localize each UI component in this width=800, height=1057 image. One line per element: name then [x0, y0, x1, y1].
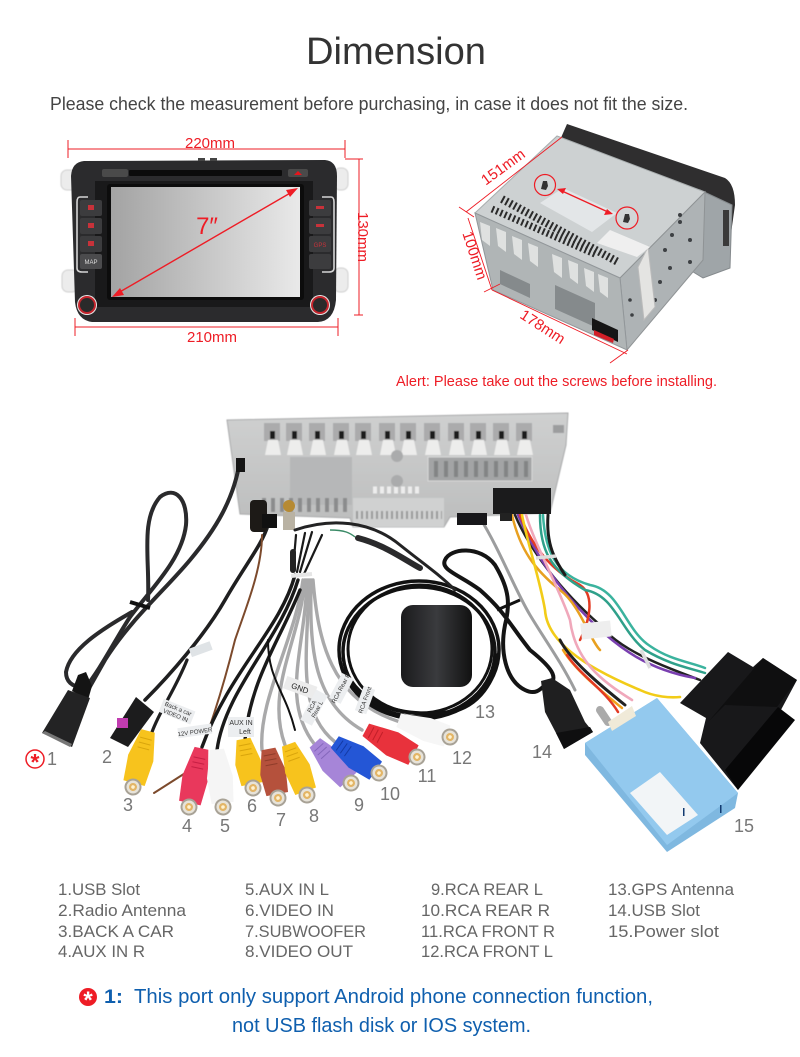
back plate — [227, 413, 568, 527]
plug 10 blue — [327, 731, 393, 789]
legend column 4: 14.USB Slot — [608, 901, 700, 920]
alert text: Alert: Please take out the screws before installing. — [396, 374, 717, 390]
subtitle: Please check the measurement before purchasing, in case it does not fit the size. — [50, 94, 688, 114]
number labels — [47, 702, 754, 836]
number labels: 11 — [418, 766, 436, 786]
plug 6 yellow — [231, 736, 267, 799]
right buttons: GPS — [314, 243, 326, 249]
number labels: 3 — [123, 795, 133, 815]
icon: asterisk marker 1 — [26, 749, 44, 775]
legend column 4: 13.GPS Antenna — [608, 880, 735, 899]
icon: mounting ears — [61, 168, 348, 292]
dimension: 178mm: 178mm — [517, 306, 568, 348]
right buttons — [309, 197, 334, 272]
power slot connector — [680, 652, 797, 790]
power connector — [592, 318, 618, 342]
dimension: 151mm: 151mm — [478, 146, 529, 189]
icon: GPS antenna — [401, 605, 472, 687]
number labels: 4 — [182, 816, 192, 836]
number labels: 10 — [380, 784, 400, 804]
dimension: 130mm — [345, 159, 371, 315]
number labels: 13 — [475, 702, 495, 722]
number labels: 1 — [47, 749, 57, 769]
legend column 3: 11.RCA FRONT R — [421, 922, 555, 941]
label: 7 inch: 7″ — [196, 213, 218, 240]
wire tags: 12V POWER — [177, 727, 214, 738]
title: Dimension — [306, 31, 486, 73]
legend column 3 — [421, 880, 555, 961]
wire tags: VIDEO IN — [162, 709, 189, 724]
black front panel — [560, 124, 735, 262]
plug 11 red — [360, 718, 431, 772]
screen — [107, 184, 304, 300]
wire tags: GND — [290, 681, 310, 696]
GPS coil — [339, 581, 499, 719]
cable: radio antenna — [145, 525, 268, 732]
number labels: 14 — [532, 742, 552, 762]
number labels: 15 — [734, 816, 754, 836]
cable: thick harness to GPS — [295, 523, 455, 590]
note text line 2: not USB flash disk or IOS system. — [232, 1015, 531, 1037]
legend column 1: 4.AUX IN R — [58, 942, 145, 961]
plug 8 yellow — [276, 740, 322, 807]
legend column 3: 9.RCA REAR L — [431, 880, 543, 899]
icon: asterisk marker note: * — [83, 987, 93, 1014]
icon: antenna plug 2 — [110, 697, 154, 747]
wire tags — [158, 670, 376, 738]
cable tie — [130, 602, 150, 608]
wire tags: AUX IN — [229, 720, 253, 727]
dimension: 100mm: 100mm — [458, 229, 490, 282]
number labels: 6 — [247, 796, 257, 816]
antenna connector base — [250, 500, 267, 532]
legend column 2: 8.VIDEO OUT — [245, 942, 353, 961]
white tabs — [480, 222, 608, 298]
legend column 2: 5.AUX IN L — [245, 880, 329, 899]
label sticker — [540, 188, 617, 232]
screws — [541, 181, 630, 223]
legend column 3: 10.RCA REAR R — [421, 901, 550, 920]
wire tags: RCA Rear R — [331, 672, 353, 705]
side label strip — [638, 247, 655, 320]
icon: asterisk marker note — [79, 987, 97, 1014]
legend column 1: 2.Radio Antenna — [58, 901, 187, 920]
disc slot — [102, 169, 308, 177]
plug 7 brown — [256, 746, 292, 809]
cable: USB 1 — [66, 460, 240, 690]
legend column 4: 15.Power slot — [608, 922, 719, 941]
number labels: 2 — [102, 747, 112, 767]
number labels: 5 — [220, 816, 230, 836]
panel: front view dimensions — [61, 135, 371, 346]
cable tie: fan — [291, 574, 312, 576]
wiring harness — [512, 515, 705, 722]
icon: USB connector 1 — [42, 672, 92, 747]
connector: ISO block at plate — [493, 488, 551, 521]
number labels: 8 — [309, 806, 319, 826]
number labels: 9 — [354, 795, 364, 815]
legend column 2 — [245, 880, 366, 961]
rear plate — [475, 213, 627, 350]
dimension: 151mm — [459, 137, 562, 217]
icon: asterisk marker 1: * — [31, 749, 40, 775]
flange — [690, 190, 732, 278]
blue power box — [585, 698, 738, 852]
dimension: 100mm — [458, 218, 500, 292]
label tag — [189, 641, 213, 657]
cable: USB 14 — [444, 550, 553, 692]
wire tags: Rear L — [311, 700, 325, 719]
wire tags: Back a car — [164, 702, 192, 718]
legend column 2: 7.SUBWOOFER — [245, 922, 366, 941]
dimension: 210mm: 210mm — [187, 329, 237, 346]
vent rows — [502, 199, 618, 262]
plug 12 white — [395, 709, 462, 751]
screw arrow — [557, 188, 613, 215]
dimension: 220mm — [68, 135, 345, 158]
left buttons — [77, 197, 102, 272]
plug 9 purple — [305, 734, 366, 798]
note number: 1: — [104, 987, 123, 1008]
plug 4 red — [175, 746, 214, 818]
side plate — [620, 192, 705, 350]
top plate — [475, 136, 705, 278]
dimension: 210mm — [75, 318, 338, 346]
dimension: 178mm — [492, 290, 628, 363]
dimension: 220mm: 220mm — [185, 135, 235, 152]
note — [79, 986, 653, 1037]
screw circles — [534, 174, 638, 229]
plug 5 white — [204, 748, 237, 817]
legend column 3: 12.RCA FRONT L — [421, 942, 553, 961]
number labels: 12 — [452, 748, 472, 768]
wire tags: RCA Front — [358, 686, 374, 715]
connector: gray wire — [480, 518, 575, 690]
legend column 1: 3.BACK A CAR — [58, 922, 174, 941]
cable ties — [536, 556, 650, 668]
panel: rear view dimensions — [458, 124, 735, 363]
icon: USB connector 14 — [541, 678, 593, 749]
left buttons: MAP — [84, 260, 98, 266]
legend column 4 — [608, 880, 735, 941]
panel: wiring diagram — [26, 413, 797, 852]
legend column 1: 1.USB Slot — [58, 880, 140, 899]
legend column 1 — [58, 880, 187, 961]
wire tags: Left — [239, 729, 251, 736]
dimension: 130mm: 130mm — [354, 212, 371, 262]
plug 3 yellow — [118, 728, 161, 799]
brown wire — [154, 535, 262, 793]
slots — [264, 423, 532, 441]
legend column 2: 6.VIDEO IN — [245, 901, 334, 920]
wiring labels — [580, 620, 612, 640]
head unit body — [71, 160, 337, 322]
wire tags: RCA — [307, 700, 318, 714]
number labels: 7 — [276, 810, 286, 830]
knobs — [77, 295, 330, 315]
diagonal arrow — [112, 188, 298, 297]
wire fan — [202, 532, 400, 750]
note text line 1: This port only support Android phone connection function, — [134, 986, 653, 1008]
legend: ports — [58, 880, 735, 961]
